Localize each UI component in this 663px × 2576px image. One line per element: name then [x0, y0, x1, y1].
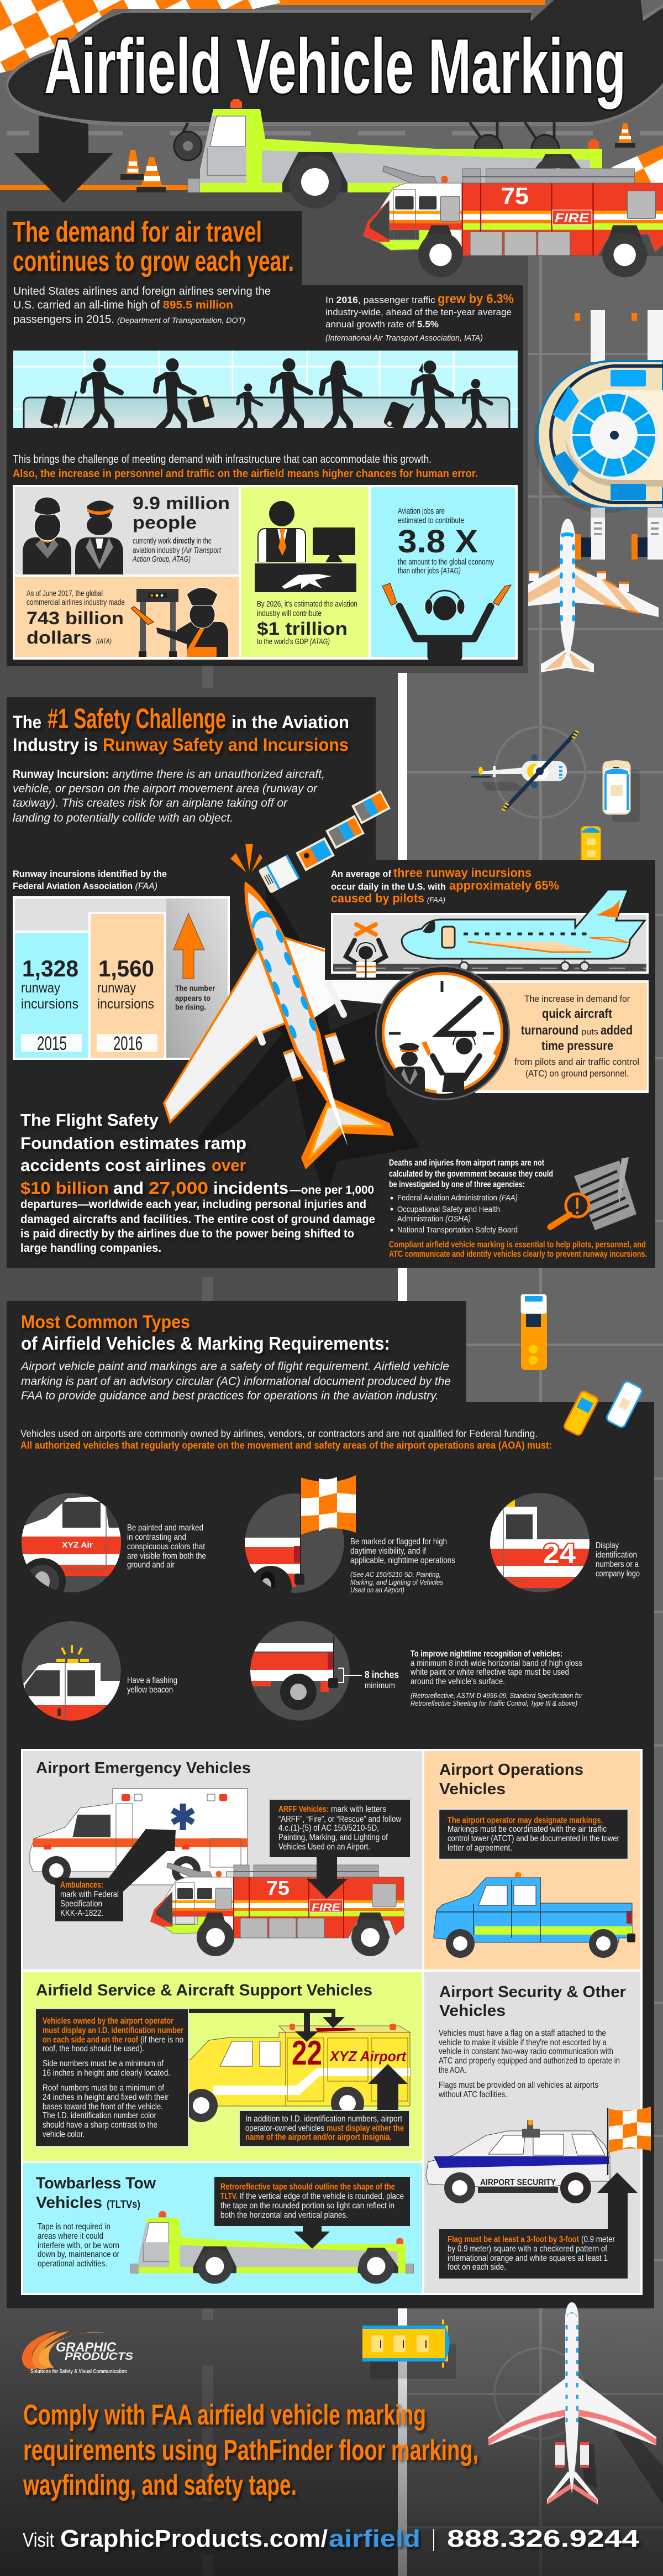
callout: airport name or insignia: name of the airport and/or airport Insignia.: [245, 2133, 392, 2142]
callout: flag size requirement: (0.9 meter: [581, 2235, 615, 2244]
callout: ARFF vehicles: [270, 1800, 410, 1899]
panel: 9.9 million people: people: [133, 513, 197, 532]
requirement: 8 inch retroreflective band: To improve nighttime recognition of vehicles:: [411, 1649, 562, 1659]
callout: vehicles owned by operator: 16 inches in height and clearly located.: [43, 2068, 170, 2078]
requirement: flashing beacon: [17, 1621, 177, 1727]
bar chart: runway incursions 2015 vs 2016: runway: [21, 980, 60, 996]
panel: towbarless tow vehicles: Towbarless Tow: [36, 2175, 156, 2192]
taxiway background: [208, 256, 663, 2576]
panel: airport security and other vehicles: Vehicles must have a flag on a staff attached to the: [439, 2029, 606, 2038]
panel: 743 billion dollars: [15, 577, 239, 657]
callout: retroreflective tape: both the horizontal and vertical planes.: [220, 2211, 348, 2220]
panel: towbarless tow vehicles: (TLTVs): [107, 2199, 140, 2211]
text: Flight Safety Foundation: large handling companies.: [20, 1242, 161, 1255]
panel: airport security and other vehicles: Vehicles: [439, 2002, 506, 2020]
illustration: marshaller and airplane: [331, 890, 649, 978]
text: runway incursion definition: landing to potentially collide with an object.: [13, 812, 233, 824]
callout: ARFF vehicles: Vehicles Used on an Airport.: [278, 1842, 370, 1852]
security SUV: AIRPORT SECURITY: [480, 2178, 556, 2187]
airplane top view, footer: [488, 2302, 663, 2505]
text: authorized vehicles must: Vehicles used on airports are commonly owned by airlines, vendors, or contractors and are not qualified for Federal funding.: [20, 1428, 538, 1439]
airplane with runway incursion, top view: [164, 881, 420, 1200]
requirement: flagged for visibility: applicable, nighttime operations: [350, 1556, 455, 1565]
callout: flag size requirement: international orange and white squares at least 1: [448, 2254, 608, 2263]
terminal building top view: [534, 310, 663, 560]
text: passengers carried: passengers in 2015.: [13, 313, 114, 326]
requirement: identification numbers: identification: [596, 1550, 637, 1560]
yellow vehicle: [176, 2024, 410, 2122]
callout: airport name or insignia: [239, 2064, 409, 2146]
requirement: flagged for visibility: daytime visibility, and if: [350, 1546, 427, 1556]
panel: 743 billion dollars: As of June 2017, the global: [27, 589, 103, 598]
icon: clock with pilot and controller: [375, 965, 510, 1100]
panel: 3.8 X: 3.8 X: [398, 524, 478, 560]
callout: vehicles owned by operator: bases toward the front of the vehicle.: [43, 2102, 163, 2112]
text: passenger traffic growth: In 2016, passenger traffic: [325, 295, 436, 305]
panel: three incursions daily background: [325, 860, 655, 980]
panel: airport security and other vehicles: Flags must be provided on all vehicles at airports: [439, 2081, 598, 2090]
panel: airport emergency vehicles: [23, 1751, 422, 1969]
requirement: painted and marked: XYZ Air: [62, 1540, 93, 1550]
callout: airport name or insignia: In addition to I.D. identification numbers, airport: [245, 2114, 403, 2124]
panel: $1 trillion: to the world's GDP (ATAG): [257, 638, 330, 646]
panel: towbarless tow vehicles: down by, maintenance or: [38, 2250, 119, 2259]
text: advisory circular: [20, 1360, 451, 1402]
text: Flight Safety Foundation: incidents: [213, 1178, 288, 1198]
requirement: 8 inch retroreflective band: [249, 1621, 583, 1721]
callout: airport name or insignia: must display either the: [327, 2124, 404, 2133]
panel: 3.8 X: estimated to contribute: [398, 516, 464, 525]
text: challenge of meeting demand: Also, the increase in personnel and traffic on the airfield means higher chances for human error.: [13, 468, 478, 480]
requirement: flagged for visibility: Be marked or flagged for high: [350, 1537, 447, 1546]
text: passenger traffic growth: grew by 6.3%: [438, 291, 514, 306]
callout: ambulances: Ambulances:: [60, 1880, 103, 1890]
fire truck: FIRE: [312, 1902, 341, 1914]
panel: quick aircraft turnaround: The increase in demand for: [524, 994, 630, 1004]
bar chart: runway incursions 2015 vs 2016: appears to: [175, 994, 211, 1002]
helicopter top view: [471, 731, 577, 811]
text: deaths and injuries from ramps: Occupational Safety and Health: [397, 1205, 500, 1214]
text: Flight Safety Foundation: $10 billion: [20, 1178, 109, 1198]
panel: towbarless tow vehicles: operational activities.: [38, 2259, 107, 2269]
panel: $1 trillion: industry will contribute: [257, 609, 322, 618]
panel: quick aircraft turnaround: quick aircraft: [542, 1006, 612, 1021]
logo: Graphic Products: PRODUCTS: [65, 2351, 133, 2363]
bar chart: runway incursions 2015 vs 2016: incursions: [97, 996, 154, 1012]
heading: number one safety challenge: [13, 703, 349, 755]
panel: airport security and other vehicles: without ATC facilities.: [438, 2090, 507, 2099]
panel: 743 billion dollars: (IATA): [96, 637, 112, 645]
panel: airport operations vehicles: The airport operator may designate markings.: [448, 1816, 603, 1825]
panel: airport operations vehicles: Airport Operations: [439, 1761, 583, 1779]
requirement: 8 inch retroreflective band: around the vehicle's surface.: [411, 1677, 505, 1686]
panel: airport operations vehicles: letter of agreement.: [448, 1843, 512, 1853]
contact line: airfield: [329, 2525, 420, 2552]
icon: collision spark: [230, 844, 262, 872]
bar chart: runway incursions 2015 vs 2016: incursions: [21, 996, 78, 1012]
text: runway incursion definition: [13, 768, 325, 824]
logo: Graphic Products: [22, 2331, 133, 2375]
text: Flight Safety Foundation: [20, 1110, 375, 1255]
panel: 9.9 million people: aviation industry (Air Transport: [133, 546, 222, 555]
callout: retroreflective tape: Retroreflective tape should outline the shape of the: [220, 2182, 395, 2192]
panel: airport emergency vehicles: Airport Emergency Vehicles: [36, 1759, 251, 1777]
panel: 9.9 million people: 9.9 million: [133, 493, 230, 513]
callout: airport name or insignia: operator-owned vehicles: [245, 2124, 324, 2133]
text: deaths and injuries from ramps: [389, 1158, 647, 1259]
panel: 9.9 million people: currently work directly in the: [133, 537, 212, 546]
panel: airport security and other vehicles: [424, 1972, 651, 2293]
bar chart: runway incursions 2015 vs 2016: 2016: [113, 1033, 143, 1054]
vehicles near the section header: [521, 1294, 643, 1436]
requirement: painted and marked: in contrasting and: [127, 1533, 186, 1542]
text: passenger traffic growth: [325, 291, 514, 343]
panel: 3.8 X: than other jobs (ATAG): [398, 567, 461, 576]
checkered corner: [0, 0, 663, 185]
icon: traffic cones: [120, 123, 635, 192]
heading: number one safety challenge: Industry is: [13, 735, 98, 755]
panel: airport security and other vehicles: Airport Security & Other: [439, 1983, 626, 2001]
baggage convoy: [258, 790, 391, 893]
panel: quick aircraft turnaround: (ATC) on ground personnel.: [525, 1069, 629, 1079]
requirement: painted and marked: ground and air: [127, 1560, 175, 1570]
requirement: 8 inch retroreflective band: Retroreflective Sheeting for Traffic Control, Type III & above): [411, 1699, 577, 1707]
requirement: painted and marked: conspicuous colors that: [127, 1542, 206, 1551]
callout: vehicles owned by operator: should have a sharp contrast to the: [43, 2120, 157, 2130]
text: advisory circular: Airport vehicle paint and markings are a safety of flight requirement. Airfield vehicle: [20, 1360, 449, 1373]
requirement: 8 inch retroreflective band: a minimum 8 inch wide horizontal band of high gloss: [411, 1659, 582, 1668]
text: Flight Safety Foundation: accidents cost airlines: [20, 1156, 206, 1175]
panel: 743 billion dollars: commercial airlines industry made: [27, 598, 125, 607]
requirement: 8 inch retroreflective band: white paint or white reflective tape must be used: [410, 1668, 569, 1677]
panel: 3.8 X: the amount to the global economy: [398, 558, 494, 567]
callout: vehicles owned by operator: The I.D. identification number color: [43, 2111, 156, 2120]
callout: ambulances: Specification: [60, 1899, 102, 1909]
text: authorized vehicles must: All authorized vehicles that regularly operate on the movement and safety areas of the airport operations area (AOA) must:: [20, 1440, 552, 1451]
callout: ambulances: mark with Federal: [60, 1890, 119, 1899]
text: Flight Safety Foundation: departures—worldwide each year, including personal injuries and: [20, 1198, 366, 1211]
text: deaths and injuries from ramps: Federal Aviation Administration (FAA): [397, 1193, 518, 1203]
requirement: identification numbers: 24: [543, 1538, 576, 1569]
text: Flight Safety Foundation: damaged aircrafts and facilities. The entire cost of ground damage: [20, 1213, 375, 1226]
text: passengers carried: [13, 285, 271, 326]
callout: vehicles owned by operator: [35, 2009, 345, 2146]
callout: vehicles owned by operator: 24 inches in height and fixed with their: [43, 2093, 169, 2102]
callout: retroreflective tape: the tape on the rounded portion so light can reflect in: [220, 2201, 394, 2211]
call to action: Comply with FAA airfield vehicle marking: [23, 2399, 426, 2431]
callout: vehicles owned by operator: Side numbers must be a minimum of: [43, 2059, 164, 2068]
panel: 9.9 million people: Action Group, ATAG): [132, 555, 191, 564]
heading: demand for air travel: The demand for air travel: [13, 216, 262, 248]
panel: 3.8 X: Aviation jobs are: [398, 507, 445, 516]
text: passenger traffic growth: annual growth rate of 5.5%: [325, 319, 439, 330]
illustration: terminal window with passengers: [13, 351, 518, 428]
logo: Graphic Products: Solutions for Safety & Visual Communication: [30, 2369, 127, 2375]
parked airplane top view: [528, 519, 659, 672]
van top view: [603, 760, 640, 822]
text: passengers carried: United States airlines and foreign airlines serving the: [13, 285, 271, 297]
requirement: flagged for visibility: [245, 1475, 455, 1593]
requirement: identification numbers: numbers or a: [596, 1560, 639, 1569]
text: three runway incursions: caused by pilots: [331, 891, 424, 905]
text: deaths and injuries from ramps: calculated by the government because they could: [389, 1169, 553, 1179]
text: Flight Safety Foundation: Foundation estimates ramp: [20, 1133, 246, 1153]
blue pickup truck: [434, 1872, 635, 1958]
ARFF fire truck, top: [363, 166, 663, 277]
panel: safety challenge upper: [7, 697, 655, 1268]
panel: quick aircraft turnaround: puts: [581, 1027, 598, 1037]
towbarless tug: [130, 2211, 414, 2284]
callout: vehicles owned by operator: roof, the hood should be used).: [43, 2044, 144, 2054]
panel: airport operations vehicles: [424, 1751, 640, 1969]
towbarless tug vehicle, top: [188, 99, 614, 208]
panel: vehicle categories frame: [21, 1749, 643, 2295]
logo: Graphic Products: GRAPHIC: [56, 2340, 117, 2355]
panel: airport security and other vehicles: the AOA.: [439, 2066, 466, 2075]
requirement: flagged for visibility: (See AC 150/5210-5D, Painting,: [350, 1571, 441, 1579]
yellow vehicle: XYZ Airport: [329, 2048, 407, 2065]
call to action: requirements using PathFinder floor marking,: [23, 2434, 478, 2467]
callout: retroreflective tape: [214, 2177, 410, 2249]
callout: vehicles owned by operator: vehicle color.: [43, 2130, 85, 2139]
panel: airport operations vehicles: Markings must be coordinated with the air traffic: [448, 1825, 607, 1834]
bar chart: runway incursions 2015 vs 2016: The number: [175, 984, 215, 992]
callout: vehicles owned by operator: Roof numbers must be a minimum of: [43, 2083, 165, 2093]
panel: $1 trillion: By 2026, it's estimated the aviation: [257, 600, 357, 609]
panel: airport security and other vehicles: vehicle in constant two-way radio communication with: [439, 2047, 613, 2056]
requirement: 8 inch retroreflective band: (Retroreflective, ASTM-D 4956-09, Standard Specification for: [411, 1691, 583, 1700]
panel: airfield service and support vehicles: Airfield Service & Aircraft Support Vehicles: [36, 1982, 372, 1999]
school bus top view, footer: [362, 2319, 456, 2379]
text: advisory circular: marking is part of an advisory circular (AC) informational document produced by the: [21, 1375, 451, 1388]
text: runway incursion definition: taxiway). This creates risk for an airplane taking off or: [13, 797, 288, 809]
requirement: flagged for visibility: Marking, and Lighting of Vehicles: [350, 1579, 443, 1586]
text: Flight Safety Foundation: and: [113, 1178, 144, 1198]
text: three runway incursions: An average of: [331, 869, 391, 879]
requirement: flashing beacon: yellow beacon: [127, 1685, 173, 1695]
text: Flight Safety Foundation: 27,000: [149, 1178, 208, 1198]
fire truck: [150, 1863, 404, 1956]
arrow: down into first section: [14, 116, 113, 203]
text: passenger traffic growth: (International Air Transport Association, IATA): [325, 333, 483, 343]
panel: $1 trillion: [241, 487, 369, 657]
text: passengers carried: (Department of Transportation, DOT): [117, 316, 245, 325]
bar chart: runway incursions 2015 vs 2016: [13, 896, 230, 1060]
requirement: identification numbers: Display: [596, 1541, 619, 1550]
callout: flag size requirement: foot on each side.: [448, 2263, 506, 2272]
text: authorized vehicles must: [20, 1428, 552, 1451]
airplane banner behind the title: [7, 0, 663, 164]
callout: vehicles owned by operator: (if there is no: [140, 2035, 183, 2045]
panel: quick aircraft turnaround: time pressure: [541, 1038, 613, 1053]
call to action: wayfinding, and safety tape.: [23, 2469, 297, 2501]
panel: towbarless tow vehicles: areas where it could: [38, 2232, 103, 2241]
callout: ARFF vehicles: ARFF Vehicles:: [278, 1805, 329, 1814]
panel: airport security and other vehicles: vehicle to make it visible if they're not escorted by a: [439, 2038, 607, 2047]
heading: number one safety challenge: Runway Safety and Incursions: [103, 735, 349, 755]
requirement: 8 inch retroreflective band: 8 inches: [365, 1669, 399, 1680]
text: runway incursion definition: vehicle, or person on the airport movement area (runway or: [13, 782, 318, 795]
panel: quick aircraft turnaround: added: [601, 1023, 633, 1037]
panel: towbarless tow vehicles: [23, 2163, 422, 2293]
callout: ARFF vehicles: mark with letters: [331, 1805, 386, 1814]
callout: flag size requirement: by 0.9 meter) square with a checkered pattern of: [448, 2244, 608, 2254]
panel: towbarless tow vehicles: interfere with, or be worn: [38, 2241, 119, 2250]
text: runway incursion definition: Runway Incursion:: [13, 768, 109, 781]
panel: 9.9 million people: [15, 487, 239, 574]
heading: number one safety challenge: in the Aviation: [231, 712, 349, 732]
panel: 743 billion dollars: 743 billion: [27, 608, 124, 628]
text: three runway incursions: [331, 866, 559, 905]
callout: vehicles owned by operator: on each side and on the roof: [43, 2035, 139, 2045]
text: deaths and injuries from ramps: be investigated by one of three agencies:: [389, 1180, 525, 1189]
callout: ARFF vehicles: Painting, Marking, and Lighting of: [278, 1833, 388, 1842]
ARFF fire truck, top: 75: [501, 183, 529, 210]
heading: number one safety challenge: The: [13, 712, 41, 732]
text: three runway incursions: approximately 65%: [449, 879, 559, 892]
contact line: Visit: [23, 2528, 54, 2551]
yellow vehicle: 22: [292, 2034, 322, 2072]
icon: document and magnifier: [550, 1157, 636, 1230]
text: advisory circular: FAA to provide guidance and best practices for operations in the aviation industry.: [21, 1389, 439, 1402]
callout: vehicles owned by operator: must display an I.D. identification number: [43, 2026, 183, 2035]
contact line: [23, 2525, 640, 2552]
panel: $1 trillion: $1 trillion: [257, 619, 348, 639]
text: three runway incursions: three runway incursions: [393, 866, 532, 880]
heading: number one safety challenge: #1 Safety Challenge: [48, 703, 226, 734]
requirement: identification numbers: [486, 1493, 640, 1592]
panel: airport operations vehicles: Vehicles: [439, 1780, 506, 1798]
panel: airport operations vehicles: control tower (ATCT) and be documented in the tower: [448, 1834, 619, 1843]
panel: aviation statistics frame: [13, 485, 518, 660]
panel: towbarless tow vehicles: Tape is not required in: [38, 2222, 110, 2232]
callout: flag size requirement: [439, 2172, 638, 2279]
heading: most common types: of Airfield Vehicles & Marking Requirements:: [21, 1333, 390, 1354]
text: deaths and injuries from ramps: Deaths and injuries from airport ramps are not: [389, 1158, 544, 1168]
requirement: painted and marked: [22, 1493, 206, 1592]
heading: demand for air travel: continues to grow each year.: [13, 245, 294, 278]
text: deaths and injuries from ramps: National Transportation Safety Board: [397, 1225, 518, 1235]
bar chart: runway incursions 2015 vs 2016: runway: [97, 980, 136, 996]
contact line: GraphicProducts.com/: [60, 2525, 328, 2552]
text: three runway incursions: occur daily in the U.S. with: [331, 881, 446, 892]
panel: airport security and other vehicles: ATC and properly equipped and authorized to operate in: [439, 2056, 620, 2066]
text: Flight Safety Foundation: over: [212, 1156, 246, 1175]
panel: quick aircraft turnaround: [475, 980, 649, 1093]
text: passengers carried: U.S. carried an all-time high of: [13, 299, 160, 311]
heading: most common types: Most Common Types: [21, 1311, 190, 1332]
requirement: flashing beacon: Have a flashing: [127, 1676, 177, 1685]
callout: ambulances: KKK-A-1822.: [60, 1909, 103, 1918]
panel: types and marking requirements: [7, 1301, 654, 2308]
bar chart: runway incursions 2015 vs 2016: be rising.: [175, 1003, 206, 1011]
callout: retroreflective tape: TLTV.: [220, 2192, 238, 2201]
callout: ARFF vehicles: “ARFF”, “Fire”, or “Rescue” and follow: [278, 1815, 402, 1824]
requirement: painted and marked: Be painted and marked: [127, 1523, 203, 1533]
callout: flag size requirement: Flag must be at least a 3-foot by 3-foot: [448, 2235, 579, 2244]
text: passengers carried: 895.5 million: [163, 299, 233, 311]
top road: [0, 0, 663, 190]
footer background fade: [0, 2308, 663, 2576]
panel: quick aircraft turnaround: turnaround: [521, 1023, 578, 1037]
text: Flight Safety Foundation: —one per 1,000: [290, 1184, 374, 1196]
text: passenger traffic growth: industry-wide, ahead of the ten-year average: [325, 307, 512, 317]
bus top view: [581, 827, 601, 874]
text: challenge of meeting demand: [13, 453, 478, 480]
security SUV: [426, 2120, 610, 2203]
call to action: [23, 2399, 478, 2501]
heading: demand for air travel: [13, 216, 294, 278]
callout: ambulances: [55, 1829, 176, 1921]
ARFF fire truck, top: FIRE: [555, 211, 590, 225]
bar chart: runway incursions 2015 vs 2016: 1,328: [22, 955, 78, 981]
callout: retroreflective tape: If the vertical edge of the vehicle is rounded, place: [240, 2192, 404, 2201]
contact line: 888.326.9244: [447, 2525, 640, 2552]
bar chart: runway incursions 2015 vs 2016: 2015: [37, 1033, 67, 1054]
panel: 743 billion dollars: dollars: [27, 628, 92, 647]
icon: checkered flag: [301, 1475, 356, 1576]
panel: quick aircraft turnaround: from pilots and air traffic control: [514, 1057, 639, 1067]
text: FAA incursions chart heading: Federal Aviation Association (FAA): [13, 881, 157, 891]
text: challenge of meeting demand: This brings the challenge of meeting demand with infrastructure that can accommodate this growth.: [13, 453, 432, 466]
callout: ARFF vehicles: 4.c.(1)-(5) of AC 150/5210-5D,: [278, 1823, 379, 1833]
text: three runway incursions: (FAA): [427, 895, 445, 904]
requirement: identification numbers: company logo: [596, 1569, 640, 1579]
text: FAA incursions chart heading: [13, 869, 167, 891]
panel: demand section: [7, 211, 523, 666]
heading: most common types: [21, 1311, 390, 1354]
icon: checkered flag on staff: [608, 2107, 651, 2175]
text: FAA incursions chart heading: Runway incursions identified by the: [13, 869, 167, 879]
panel: towbarless tow vehicles: Vehicles: [36, 2194, 102, 2212]
panel: 3.8 X: [371, 487, 515, 657]
fire truck: 75: [266, 1877, 290, 1899]
text: deaths and injuries from ramps: Administration (OSHA): [397, 1214, 471, 1224]
panel: airfield service and support vehicles: [23, 1972, 422, 2161]
ambulance: [30, 1789, 248, 1885]
bar chart: runway incursions 2015 vs 2016: 1,560: [98, 955, 154, 981]
text: Flight Safety Foundation: is paid directly by the airlines due to the power being shifted to: [20, 1227, 354, 1240]
callout: vehicles owned by operator: Vehicles owned by the airport operator: [43, 2016, 173, 2026]
text: Flight Safety Foundation: The Flight Safety: [20, 1110, 159, 1130]
requirement: flagged for visibility: Used on an Airport): [350, 1586, 404, 1594]
requirement: painted and marked: are visible from both the: [127, 1551, 206, 1561]
requirement: 8 inch retroreflective band: minimum: [365, 1681, 395, 1690]
text: runway incursion definition: anytime there is an unauthorized aircraft,: [112, 768, 325, 781]
